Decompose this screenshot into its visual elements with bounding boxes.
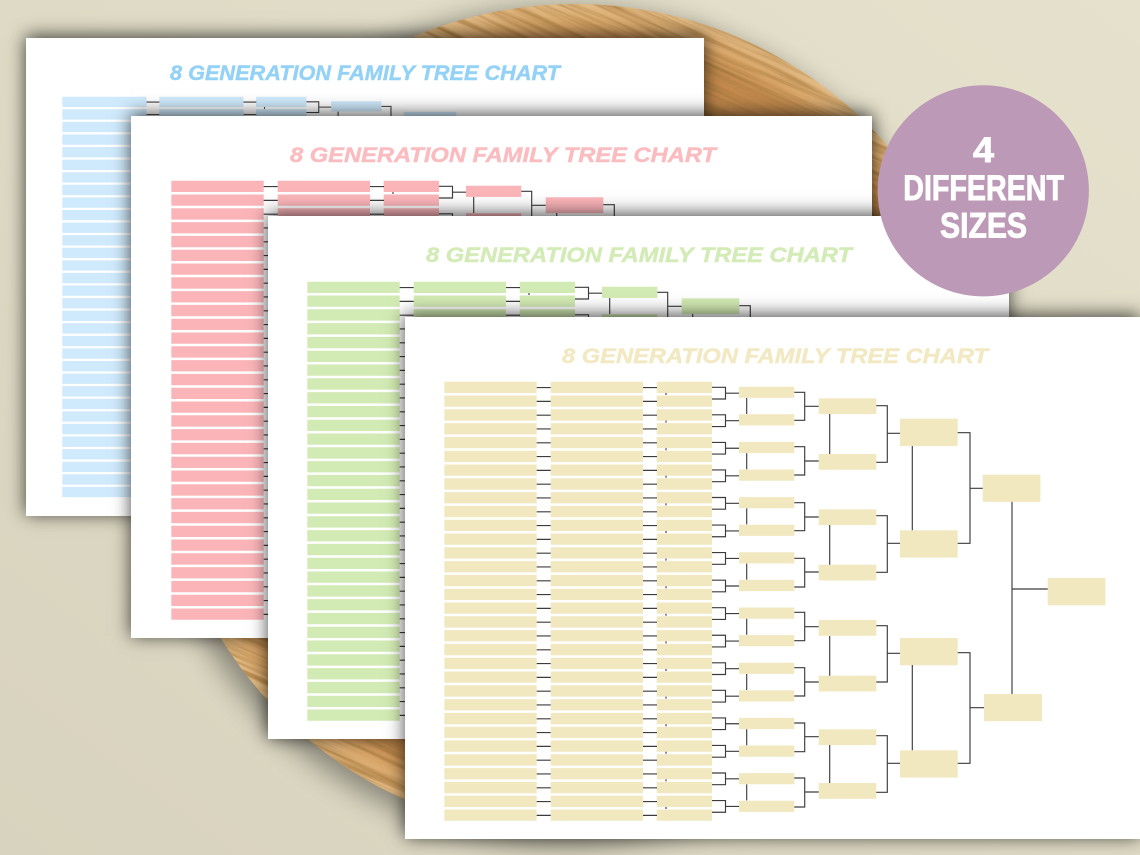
generation 8 boxes [983, 475, 1105, 721]
panel: green chart sheet [268, 216, 1008, 739]
badge text [903, 131, 1064, 245]
badge text: DIFFERENT [903, 169, 1064, 208]
panel: yellow chart sheet [405, 317, 1140, 839]
green family tree chart [354, 282, 968, 721]
heading: green chart title: 8 GENERATION FAMILY TREE CHART [426, 243, 854, 267]
generation 6 boxes [819, 398, 876, 799]
badge text: SIZES [940, 206, 1027, 245]
connector lines [544, 387, 1048, 820]
blue family tree chart [104, 97, 665, 497]
generation 7 boxes [900, 419, 958, 778]
heading: pink chart title: 8 GENERATION FAMILY TREE CHART [290, 143, 718, 167]
panel: pink chart sheet [131, 116, 872, 638]
pink family tree chart [218, 181, 832, 620]
badge text: 4 [973, 131, 995, 170]
generation 1 to 3 row columns [490, 382, 767, 821]
yellow family tree chart [490, 382, 1105, 821]
badge: 4 different sizes [878, 85, 1089, 296]
wooden bowl [147, 4, 991, 844]
heading: blue chart title: 8 GENERATION FAMILY TREE CHART [170, 61, 562, 85]
heading: yellow chart title: 8 GENERATION FAMILY TREE CHART [562, 344, 990, 368]
panel: blue chart sheet [26, 38, 704, 516]
